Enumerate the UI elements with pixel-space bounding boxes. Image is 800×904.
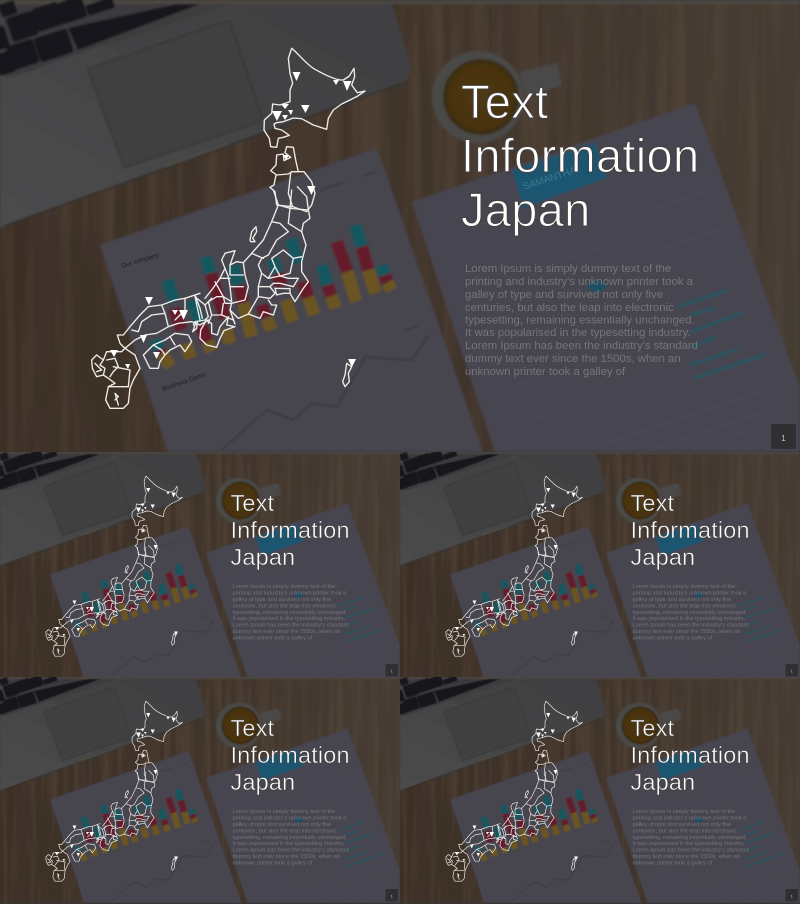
thumbnail body text: unknown printer took a galley of — [232, 860, 313, 866]
body text: centuries, but also the leap into electronic — [465, 302, 674, 314]
thumbnail body text: typesetting, remaining essentially unchanged. — [632, 610, 747, 616]
thumbnail body text: unknown printer took a galley of — [232, 636, 313, 642]
body text — [465, 263, 698, 378]
thumbnail slide: bottom left — [0, 675, 400, 903]
thumbnail body text: centuries, but also the leap into electronic — [232, 828, 337, 834]
thumbnail background photo — [0, 675, 400, 903]
thumbnail body text: dummy text ever since the 1500s, when an — [232, 854, 340, 860]
body text: Lorem Ipsum has been the industry's standard — [465, 340, 698, 352]
thumbnail body text — [632, 809, 749, 866]
thumbnail body text — [632, 584, 749, 642]
thumbnail page number box: 1 — [391, 894, 394, 898]
thumbnail title: Information — [230, 517, 350, 543]
body text: typesetting, remaining essentially unchanged. — [465, 314, 695, 326]
thumbnail background photo — [396, 675, 800, 903]
thumbnail body text: centuries, but also the leap into electronic — [232, 604, 337, 610]
thumbnail body text — [232, 584, 349, 642]
thumbnail body text: dummy text ever since the 1500s, when an — [232, 629, 340, 635]
thumbnail body text: printing and industry's unknown printer took a — [632, 590, 747, 596]
thumbnail title: Japan — [230, 769, 295, 795]
thumbnail body text: galley of type and survived not only five — [232, 822, 331, 828]
title: Text — [461, 75, 548, 128]
thumbnail body text: unknown printer took a galley of — [632, 636, 713, 642]
thumbnail map of Japan — [446, 701, 582, 881]
thumbnail page number box: 1 — [791, 894, 794, 898]
thumbnail body text: It was popularised in the typesetting industry. — [632, 616, 745, 622]
thumbnail slide: top right — [396, 450, 800, 678]
background photo: desk with laptop, charts and coffee — [0, 0, 800, 452]
thumbnail body text: Lorem Ipsum has been the industry's standard — [232, 622, 349, 628]
thumbnail body text: typesetting, remaining essentially unchanged. — [232, 610, 347, 616]
thumbnail body text: galley of type and survived not only five — [632, 597, 731, 603]
thumbnail title: Text — [230, 490, 275, 516]
body text: Lorem Ipsum is simply dummy text of the — [465, 263, 671, 275]
thumbnail body text: Lorem Ipsum is simply dummy text of the — [232, 809, 335, 815]
main slide — [0, 0, 800, 452]
thumbnail map of Japan — [46, 701, 182, 881]
thumbnail body text: It was popularised in the typesetting industry. — [232, 841, 345, 847]
thumbnail body text: It was popularised in the typesetting industry. — [632, 841, 745, 847]
thumbnail title: Information — [230, 742, 350, 768]
title: Information — [461, 129, 699, 182]
thumbnail title: Text — [230, 715, 275, 741]
paper label: Business Game: Business Game — [161, 371, 207, 393]
thumbnail title: Information — [630, 742, 750, 768]
thumbnail body text: Lorem Ipsum has been the industry's standard — [232, 848, 349, 854]
thumbnail page number box: 1 — [791, 668, 794, 674]
thumbnail slide: bottom right — [396, 675, 800, 903]
thumbnail title — [630, 715, 750, 795]
thumbnail body text: Lorem Ipsum is simply dummy text of the — [232, 584, 335, 590]
thumbnail body text: Lorem Ipsum is simply dummy text of the — [632, 584, 735, 590]
thumbnail title: Japan — [630, 544, 695, 570]
title: Japan — [461, 183, 591, 236]
thumbnail body text: It was popularised in the typesetting industry. — [232, 616, 345, 622]
thumbnail background photo — [396, 450, 800, 678]
body text: galley of type and survived not only five — [465, 289, 663, 301]
thumbnail body text: typesetting, remaining essentially unchanged. — [632, 835, 747, 841]
thumbnail body text: printing and industry's unknown printer took a — [232, 590, 347, 596]
thumbnail title: Information — [630, 517, 750, 543]
thumbnail page number box — [386, 664, 398, 676]
thumbnail slide: top left — [0, 450, 400, 678]
thumbnail body text: printing and industry's unknown printer took a — [632, 816, 747, 822]
page number box: 1 — [781, 434, 786, 443]
thumbnail title: Text — [630, 490, 675, 516]
title — [461, 75, 699, 236]
thumbnail background photo — [0, 450, 400, 678]
thumbnail body text: galley of type and survived not only five — [232, 597, 331, 603]
thumbnail map of Japan — [46, 476, 182, 656]
thumbnail title — [230, 490, 350, 570]
paper label: Our company: Our company — [121, 252, 161, 270]
thumbnail title: Japan — [230, 544, 295, 570]
thumbnail body text: Lorem Ipsum is simply dummy text of the — [632, 809, 735, 815]
thumbnail title — [630, 490, 750, 570]
body text: unknown printer took a galley of — [465, 366, 626, 378]
body text: dummy text ever since the 1500s, when an — [465, 353, 681, 365]
thumbnail body text: dummy text ever since the 1500s, when an — [632, 854, 740, 860]
thumbnail page number box — [386, 889, 398, 902]
thumbnail title: Japan — [630, 769, 695, 795]
thumbnail body text: unknown printer took a galley of — [632, 860, 713, 866]
thumbnail page number box — [786, 664, 798, 676]
thumbnail page number box — [786, 889, 798, 902]
paper label: name block: SAMANTHA — [522, 165, 578, 193]
body text: It was popularised in the typesetting industry. — [465, 327, 691, 339]
thumbnail page number box: 1 — [391, 668, 394, 674]
thumbnail body text: galley of type and survived not only five — [632, 822, 731, 828]
thumbnail body text — [232, 809, 349, 866]
thumbnail title: Text — [630, 715, 675, 741]
map of Japan with markers — [92, 48, 365, 408]
thumbnail body text: dummy text ever since the 1500s, when an — [632, 629, 740, 635]
body text: printing and industry's unknown printer took a — [465, 276, 694, 288]
thumbnail body text: typesetting, remaining essentially unchanged. — [232, 835, 347, 841]
thumbnail title — [230, 715, 350, 795]
page number box — [771, 424, 796, 449]
thumbnail body text: printing and industry's unknown printer took a — [232, 816, 347, 822]
thumbnail body text: Lorem Ipsum has been the industry's standard — [632, 848, 749, 854]
thumbnail body text: centuries, but also the leap into electronic — [632, 828, 737, 834]
thumbnail body text: centuries, but also the leap into electronic — [632, 604, 737, 610]
thumbnail map of Japan — [446, 476, 582, 656]
thumbnail body text: Lorem Ipsum has been the industry's standard — [632, 622, 749, 628]
